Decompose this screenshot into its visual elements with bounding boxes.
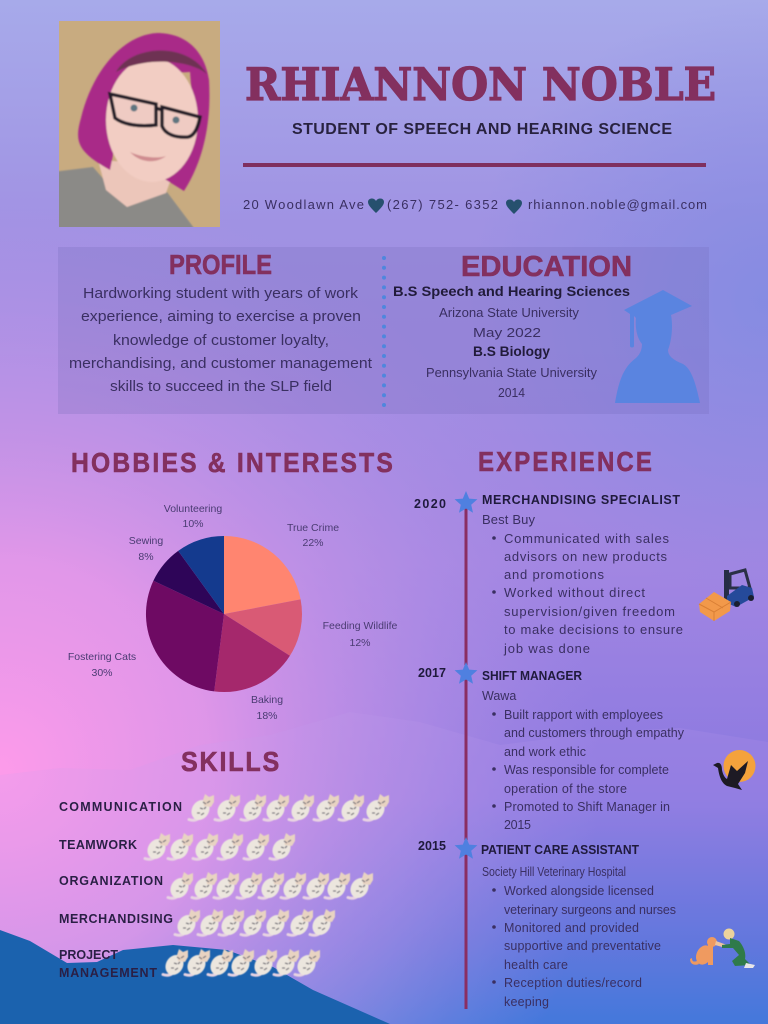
job: patient care assistant: Reception duties/record — [504, 976, 642, 990]
star: 2015 — [455, 837, 477, 859]
pie chart: hobbies: Fostering Cats — [68, 651, 136, 663]
pie chart: hobbies: 12% — [349, 637, 371, 649]
job: patient care assistant: Worked alongside licensed — [504, 884, 654, 898]
heading: education: EDUCATION — [461, 251, 632, 283]
job: shift manager: and work ethic — [504, 745, 586, 759]
job: merchandising specialist: job was done — [503, 641, 590, 656]
job: shift manager — [482, 669, 685, 832]
job: shift manager: Wawa — [482, 689, 516, 703]
job: merchandising specialist: and promotions — [504, 567, 604, 582]
profile text: skills to succeed in the SLP field — [110, 378, 332, 395]
skill: merchandising — [59, 909, 335, 938]
education text: Pennsylvania State University — [426, 365, 597, 380]
star: 2020 — [455, 491, 477, 513]
icon: forklift with boxes — [699, 570, 754, 621]
skill: communication: COMMUNICATION — [59, 800, 182, 814]
pie chart: hobbies: 8% — [138, 551, 154, 563]
job: shift manager: SHIFT MANAGER — [482, 669, 582, 683]
job: patient care assistant: Monitored and provided — [504, 921, 639, 935]
job: merchandising specialist: MERCHANDISING SPECIALIST — [482, 493, 680, 507]
skill: merchandising: MERCHANDISING — [59, 912, 173, 926]
skill: project management — [59, 948, 320, 980]
job: merchandising specialist: to make decisions to ensure — [504, 622, 683, 637]
heading: profile: PROFILE — [169, 249, 272, 280]
skill: teamwork — [59, 833, 295, 862]
heading: experience: EXPERIENCE — [478, 446, 654, 477]
education text: Arizona State University — [439, 305, 579, 320]
job: merchandising specialist: Best Buy — [482, 512, 536, 527]
pie chart: hobbies: Feeding Wildlife — [323, 620, 398, 632]
contact line — [243, 197, 707, 214]
pie chart: hobbies: Baking — [251, 694, 283, 706]
skill: project management: PROJECT — [59, 948, 118, 962]
title: RHIANNON NOBLE — [245, 58, 716, 111]
education text: B.S Biology — [473, 343, 550, 359]
job: merchandising specialist: Communicated with sales — [504, 531, 670, 546]
job: patient care assistant: Society Hill Veterinary Hospital — [482, 865, 626, 879]
contact line: (267) 752- 6352 — [387, 197, 498, 212]
contact line: 20 Woodlawn Ave — [243, 197, 364, 212]
pie chart: hobbies: 18% — [256, 710, 278, 722]
pie chart: hobbies: 30% — [91, 667, 113, 679]
job: shift manager: Promoted to Shift Manager in — [504, 800, 670, 814]
heading: skills: SKILLS — [181, 746, 281, 777]
job: patient care assistant: health care — [504, 958, 568, 972]
education text: May 2022 — [473, 325, 541, 340]
job: patient care assistant: keeping — [504, 995, 549, 1009]
pie chart: hobbies: Volunteering — [164, 503, 222, 515]
job: patient care assistant: supportive and preventative — [504, 939, 661, 953]
contact line: rhiannon.noble@gmail.com — [528, 197, 707, 212]
education text — [393, 283, 630, 400]
heading: hobbies and interests: HOBBIES & INTERESTS — [71, 447, 395, 478]
skill: teamwork: TEAMWORK — [59, 838, 137, 852]
timeline: 2017 — [418, 666, 446, 680]
header rule — [243, 163, 706, 167]
job: merchandising specialist: Worked without direct — [504, 585, 645, 600]
timeline: 2020 — [414, 497, 446, 511]
profile text: knowledge of customer loyalty, — [113, 332, 329, 349]
skill: project management: MANAGEMENT — [59, 966, 157, 980]
background mountains — [0, 712, 768, 1024]
education text: B.S Speech and Hearing Sciences — [393, 283, 630, 299]
job: merchandising specialist: advisors on new products — [504, 549, 668, 564]
job: shift manager: and customers through empathy — [504, 726, 685, 740]
profile text: merchandising, and customer management — [69, 355, 373, 372]
job: patient care assistant: PATIENT CARE ASSISTANT — [481, 843, 639, 857]
job: patient care assistant — [481, 843, 676, 1009]
timeline: 2015 — [418, 839, 446, 853]
skill: organization: ORGANIZATION — [59, 874, 163, 888]
star: 2017 — [455, 662, 477, 684]
job: shift manager: operation of the store — [504, 782, 627, 796]
job: patient care assistant: veterinary surgeons and nurses — [504, 903, 676, 917]
job: shift manager: 2015 — [504, 818, 531, 832]
profile text: experience, aiming to exercise a proven — [81, 308, 361, 325]
education text: 2014 — [498, 385, 525, 400]
subtitle: STUDENT OF SPEECH AND HEARING SCIENCE — [292, 121, 672, 138]
profile text — [69, 285, 373, 395]
pie chart: hobbies — [68, 503, 398, 722]
dotted divider — [382, 258, 386, 405]
pie chart: hobbies: 10% — [182, 518, 204, 530]
job: shift manager: Was responsible for complete — [504, 763, 669, 777]
profile text: Hardworking student with years of work — [83, 285, 359, 302]
job: merchandising specialist: supervision/given freedom — [504, 604, 675, 619]
photo: portrait of Rhiannon — [52, 21, 220, 232]
panel: profile and education — [58, 247, 709, 414]
icon: bird and sun — [713, 750, 756, 790]
pie chart: hobbies: True Crime — [287, 522, 339, 534]
skill: organization — [59, 872, 373, 901]
timeline — [414, 491, 477, 1009]
pie chart: hobbies: Sewing — [129, 535, 163, 547]
icon: vet with dog — [690, 928, 755, 968]
job: merchandising specialist — [482, 493, 683, 656]
pie chart: hobbies: 22% — [302, 537, 324, 549]
job: shift manager: Built rapport with employees — [504, 708, 663, 722]
skill: communication — [59, 794, 389, 823]
icon: graduate silhouette — [615, 290, 700, 403]
icon: heart — [368, 198, 384, 213]
icon: heart — [506, 199, 522, 214]
